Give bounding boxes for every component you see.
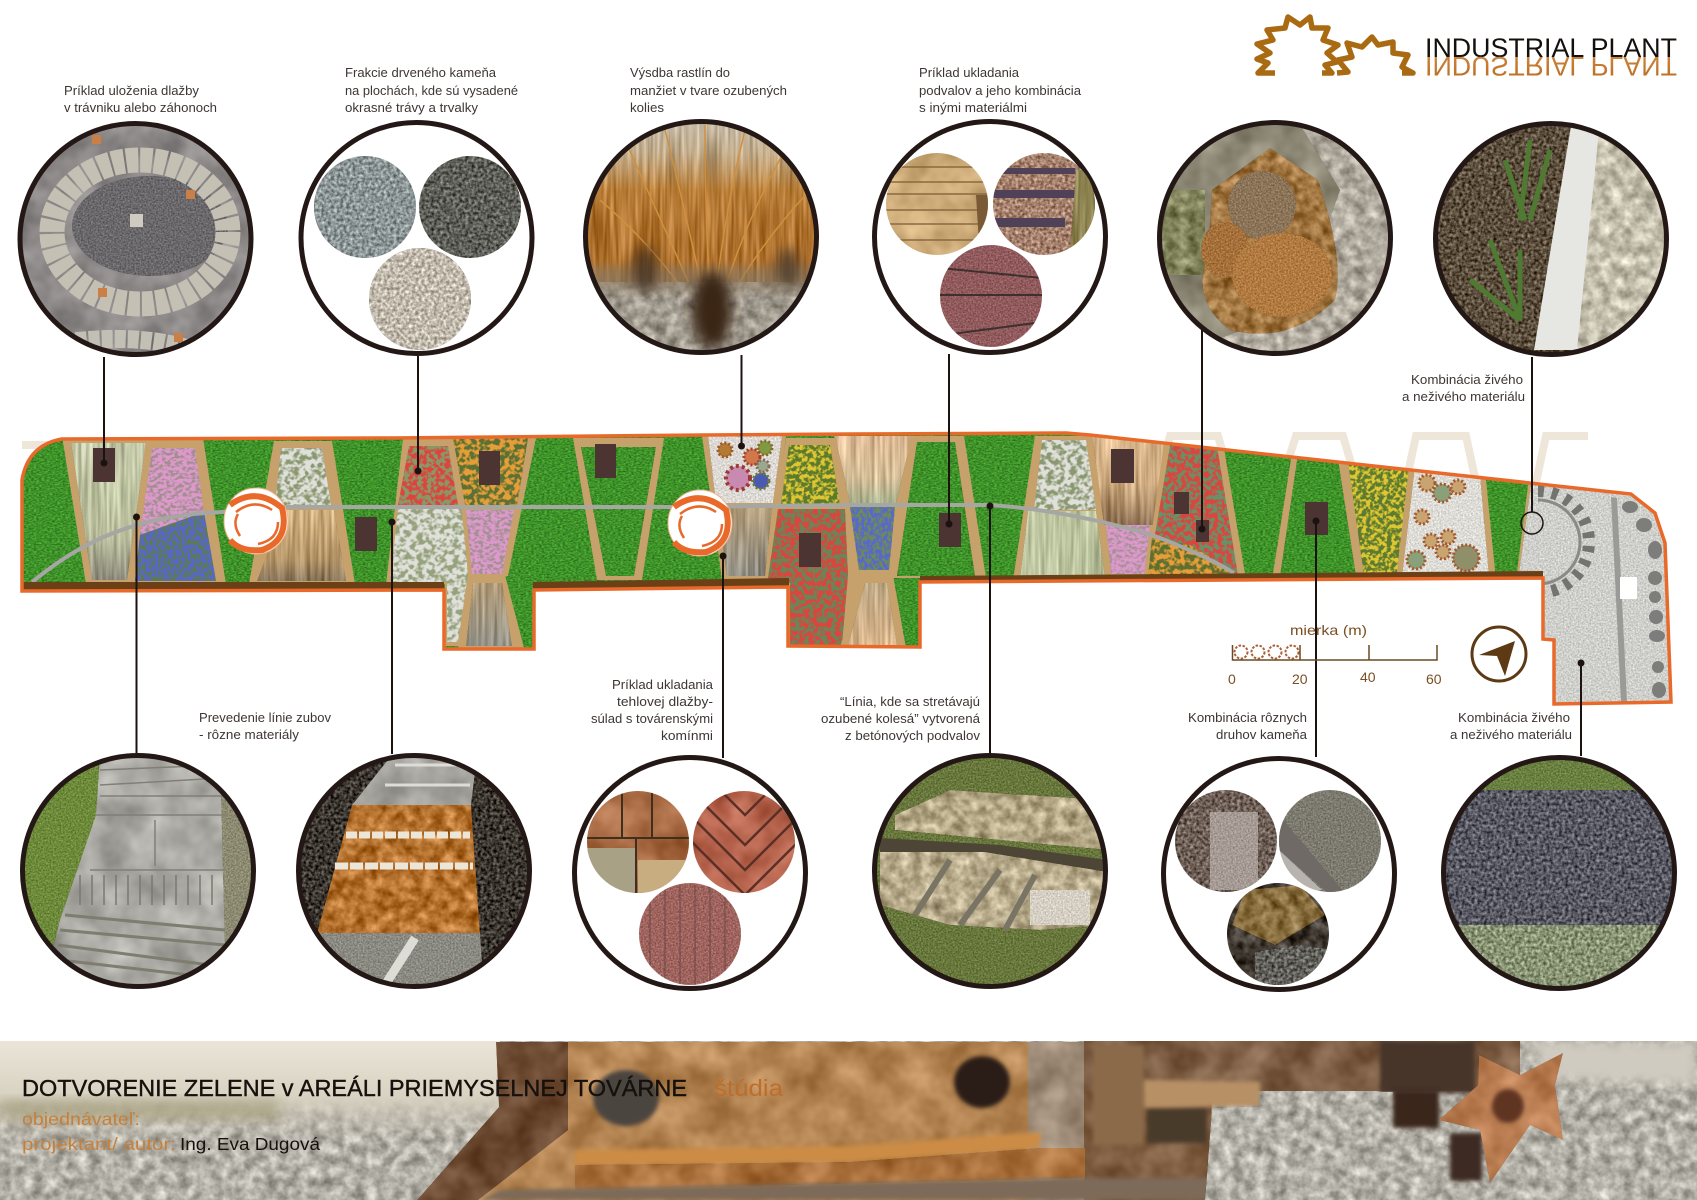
caption: bottom 6: Kombinácia živého [1458,710,1570,725]
footer: star gear hole [1492,1089,1524,1123]
caption: bottom 3: Príklad ukladania [612,677,714,692]
photo: bottom 6 dark ballast [1441,755,1677,995]
sleeper: brick with timber [940,245,1042,347]
icon: north arrow [1472,627,1526,681]
caption: bottom 1 [199,710,332,742]
caption: bottom 5: Kombinácia rôznych [1188,710,1307,725]
caption: bottom 3: súlad s továrenskými [591,711,713,726]
bed 5: orange and pink flowers [453,438,536,576]
sleeper: wooden stack [886,153,988,255]
footer: lower block [1084,1091,1212,1200]
stone: dark fraction [419,156,521,258]
caption: top 1 [64,83,217,115]
caption: top 2: Frakcie drveného kameňa [345,65,497,80]
footer: shadow below [480,1178,1209,1200]
footer: rust beam [417,1042,570,1200]
footer author: projektant/ autor: [22,1134,176,1154]
footer client label: objednávateľ: [22,1109,140,1129]
scale pattern [1234,646,1298,658]
caption: bottom 1: - rôzne materiály [199,727,300,742]
caption: bottom 1: Prevedenie línie zubov [199,710,332,725]
scale bar: 20 [1292,671,1308,687]
ghost gear outline behind plan [22,436,1588,510]
sleeper: stepped gravel [990,153,1098,255]
footer: bright bracket [1144,1080,1260,1108]
caption: bottom 5 [1188,710,1308,742]
photo: bottom 4 concrete sleepers [873,755,1108,990]
caption: top 1: Príklad uloženia dlažby [64,83,199,98]
caption: top 6: Kombinácia živého [1411,372,1523,387]
caption: top 4: podvalov a jeho kombinácia [919,83,1082,98]
photo: bottom 5 stone combinations [1164,758,1394,990]
plan: paving rectangles [93,444,1328,567]
footer: soft green band [0,1100,280,1120]
bed: white flowers and pale grass [1013,436,1110,580]
stone: slab in gravel [1175,789,1277,893]
stone: timber and ballast [1227,883,1335,990]
stone: paving and gravel [1279,790,1381,895]
caption: bottom 6 [1450,710,1572,742]
footer: orange ledge [575,1132,1040,1165]
scale bar: 60 [1426,671,1442,687]
caption: top 2: okrasné trávy a trvalky [345,100,479,115]
footer study tag: štúdia [714,1075,783,1101]
footer: rust block [478,1042,1030,1200]
photo: top 6 curb with stones [1433,120,1697,360]
stone: light fraction [369,248,471,350]
connector lines to plan [104,330,1581,758]
caption: top 3: kolies [630,100,664,115]
bed 2: pink and blue flowers [130,438,226,584]
scale axis [1232,645,1437,660]
plan: orange outline [22,433,1671,704]
lawn tooth 3 [1273,458,1357,574]
logo wordmark: INDUSTRIAL PLANT [1425,33,1677,63]
photo: top 5 stone relief [1158,120,1395,360]
footer: upper band [1084,1041,1520,1091]
photo: top 4 sleepers [874,122,1106,352]
bed: peach grass and pink flowers [1092,437,1164,574]
bed 4: red and white flowers [386,438,473,646]
caption: bottom 4: ozubené kolesá” vytvorená [821,711,981,726]
footer: lower block face [575,1148,1085,1190]
lawn tooth with paving [573,438,664,580]
footer: lower star shadow [1450,1133,1482,1181]
caption: bottom 4: z betónových podvalov [845,728,980,743]
footer author: Ing. Eva Dugová [180,1134,320,1154]
plan: gear contact line [32,505,1234,582]
caption: top 3: manžiet v tvare ozubených [630,83,787,98]
footer: block side plate [1028,1042,1084,1200]
footer: gravel patch [1205,1092,1490,1200]
badge: right orange swirl [668,490,732,556]
bed 3: white flowers and beige grass [249,441,355,584]
bed: gravel with gears 2 [1396,472,1496,572]
wall near gravel [1517,484,1531,572]
caption: bottom 6: a neživého materiálu [1450,727,1572,742]
site plan [20,430,1697,720]
icon: gears [1257,17,1413,73]
caption: top 6 [1402,372,1525,404]
caption: top 4 [919,65,1082,115]
caption: top 1: v trávniku alebo záhonoch [64,100,217,115]
footer: hole 1 [593,1070,659,1126]
photo: bottom 3 bricks [574,758,806,990]
brick: red paving [639,883,742,990]
caption: bottom 4 [821,694,981,743]
footer: bracket [1093,1045,1144,1145]
footer: dark upper section [1380,1041,1475,1093]
connector dots [100,442,1584,666]
stone: grey fraction [314,156,416,258]
bed 1: pale grass [62,436,150,584]
photo: top 1 cobbles [15,120,255,360]
bed 6: notch grass [458,575,524,648]
caption: top 3: Výsdba rastlín do [630,65,730,80]
caption: bottom 3 [591,677,714,743]
plan: brown edging strip [24,582,444,590]
badge: left orange swirl [224,488,288,554]
footer band [0,1041,1697,1200]
footer: hole 2 [954,1056,1010,1108]
gravel plaza [1519,485,1670,702]
caption: top 6: a neživého materiálu [1402,389,1525,404]
scale bar: 40 [1360,669,1376,685]
footer author [22,1134,320,1154]
footer: star gear [1439,1053,1563,1183]
bed 8: gravel with gears [702,436,786,580]
caption: top 2 [345,65,518,115]
scale bar [1228,622,1442,687]
plan: brown edging strip right [920,571,1543,580]
footer: bracket shadows [1147,1107,1207,1143]
photo: top 2 crushed stone [301,122,532,354]
plan: brown edging strip middle [533,578,789,588]
caption: bottom 3: komínmi [661,728,713,743]
scale bar: 0 [1228,671,1236,687]
photo: bottom 2 brick path [295,755,535,990]
caption: bottom 5: druhov kameňa [1216,727,1308,742]
caption: bottom 3: tehlovej dlažby- [617,694,713,709]
caption: top 4: s inými materiálmi [919,100,1027,115]
logo reflection: INDUSTRIAL PLANT [1425,51,1677,81]
brick: old wall [586,790,690,900]
bed: yellow flowers [1346,464,1408,572]
caption: top 4: Príklad ukladania [919,65,1020,80]
logo: Industrial Plant [1257,17,1677,81]
brick: herringbone [690,790,800,895]
scale title: mierka (m) [1290,622,1367,638]
bed 9: yellow and red flowers [765,438,860,648]
footer: pale area right [1520,1041,1697,1085]
photo: top 3 orange grass [585,120,820,357]
plan: lawn [20,430,1580,655]
lawn tooth 2 [890,436,986,578]
footer: gravel background [0,1041,1697,1200]
footer: pale sky area left [0,1041,500,1200]
open ring marker [1521,512,1543,534]
caption: top 3 [630,65,787,115]
footer title: DOTVORENIE ZELENE v AREÁLI PRIEMYSELNEJ TOVÁRNE [22,1075,687,1101]
bed: red and orange flowers [1148,445,1245,574]
caption: bottom 4: “Línia, kde sa stretávajú [840,694,980,709]
photo: bottom 1 concrete pavers [22,755,260,990]
footer: star gear shadow [1393,1090,1439,1128]
bed 10: peach grass and blue flowers [834,436,910,646]
caption: top 2: na plochách, kde sú vysadené [345,83,518,98]
